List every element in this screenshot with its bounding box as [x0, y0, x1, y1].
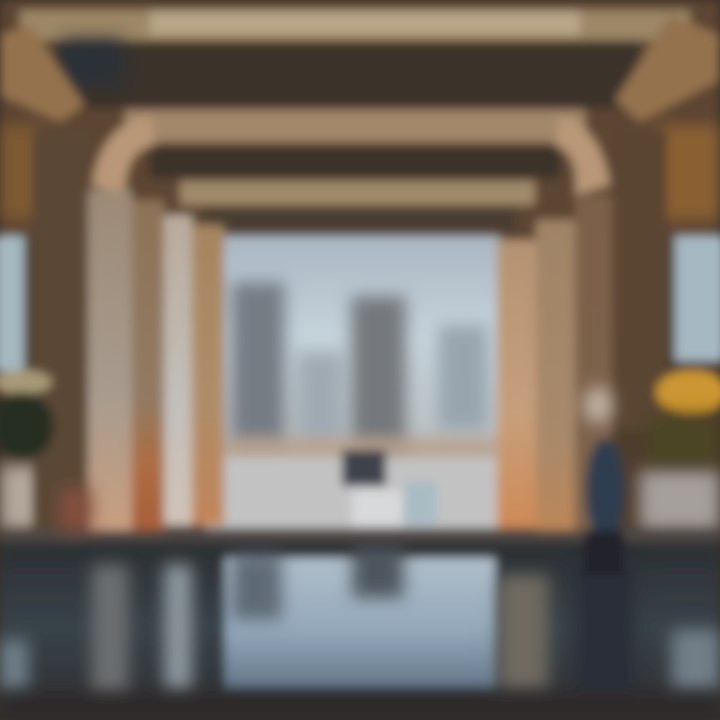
panel: ceiling beams — [0, 0, 720, 240]
panel: left side window — [0, 236, 24, 371]
panel: reflective floor — [0, 535, 720, 720]
panel: right side window — [675, 236, 720, 361]
icon: left green foliage — [0, 370, 54, 460]
building: centre tower — [351, 296, 406, 456]
panel: sky and city view — [222, 236, 500, 461]
panel: left columns — [32, 130, 224, 530]
icon: standing person — [584, 438, 624, 575]
building: left tower — [231, 282, 285, 447]
panel: plaza ground — [0, 438, 720, 542]
building: right tower — [438, 325, 488, 430]
building: small middle tower — [296, 352, 344, 442]
panel: right columns — [497, 130, 667, 530]
icon: right yellow foliage — [645, 370, 720, 465]
